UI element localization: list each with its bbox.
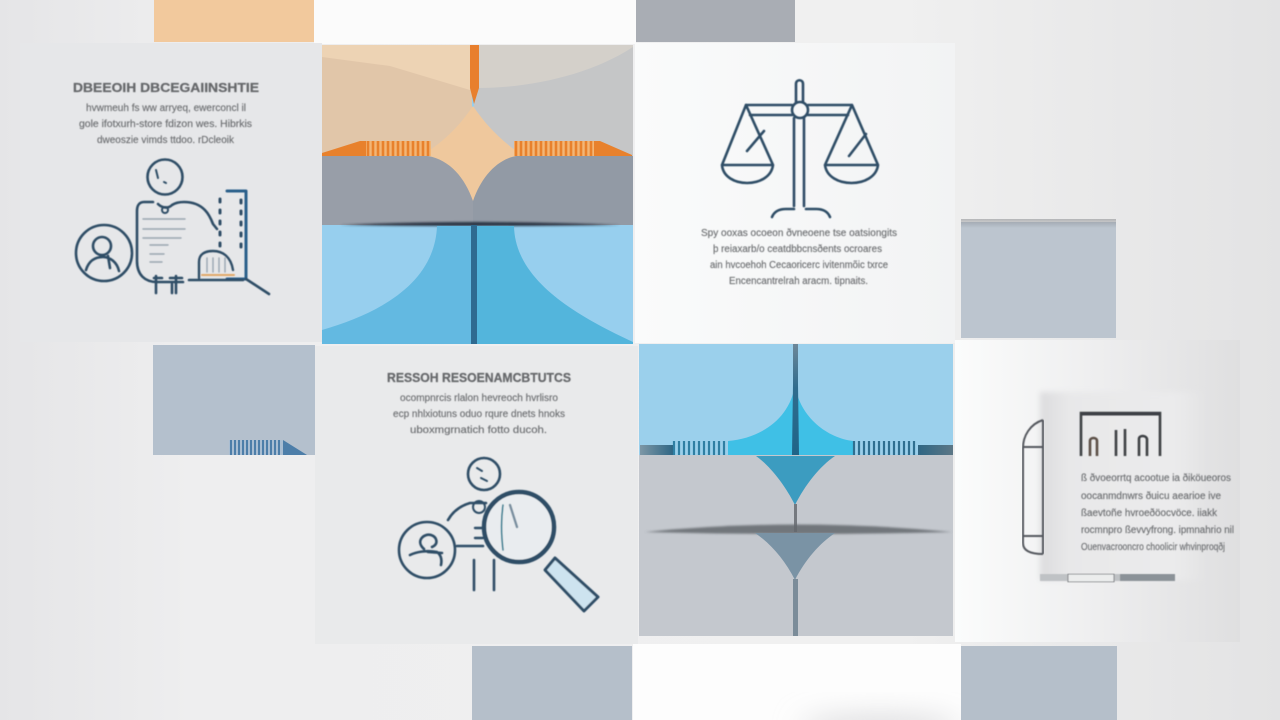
gray funnel	[755, 533, 835, 580]
icon: pen vertical	[1023, 420, 1043, 554]
icon: person with chart and magnifier	[76, 160, 269, 294]
text block: scales: ain hvcoehoh Cecaoricerc ivitenmõic txrce	[710, 260, 888, 271]
right dark stripes	[854, 441, 953, 455]
center shadow line	[340, 222, 620, 226]
icon: bar chart frame	[1081, 413, 1160, 456]
text block: report: ßaevtoñe hvroeðöocvöce. iiakk	[1081, 507, 1218, 519]
top strip: gray block	[636, 0, 795, 42]
shadow ellipse	[645, 524, 952, 534]
lower gray bands	[322, 156, 473, 225]
icon: person with magnifier	[399, 458, 598, 611]
text block: research overview: gole ifotxurh-store fdizon wes. Hibrkis	[79, 119, 252, 130]
heading: research findings: RESSOH RESOENAMCBTUTCS	[387, 370, 571, 385]
blue left curved area	[322, 226, 472, 344]
blue right curved area	[477, 226, 633, 344]
text block: research findings: uboxmgrnatich fotto ducoh.	[410, 425, 547, 436]
document sheet	[1040, 392, 1205, 580]
icon: pen horizontal	[1040, 574, 1175, 582]
peach diamond	[428, 106, 516, 201]
text block: research overview: dweoszie vimds ttdoo. rDcleoik	[97, 135, 235, 146]
text block: research findings: ocompnrcis rlalon hevreoch hvrlisro	[400, 393, 558, 404]
thin connector	[794, 504, 797, 532]
text block: scales: þ reiaxarb/o ceatdbbcnsðents ocroares	[713, 243, 882, 255]
text block: report: ß ðvoeorrtq acootue ia ðiköueoros	[1081, 472, 1231, 484]
panel: research overview	[20, 43, 322, 342]
text block: research overview	[79, 103, 252, 146]
text block: research overview: hvwmeuh fs ww arryeq, ewerconcl il	[86, 103, 246, 114]
chart art: blue and gray quadrants	[639, 344, 953, 636]
cyan star shape	[728, 385, 853, 455]
panel: research findings	[315, 346, 638, 644]
text block: scales	[701, 227, 897, 287]
center dark bar	[471, 225, 477, 344]
text block: report: Ouenvacrooncro choolicir whvinproqðj	[1081, 541, 1225, 553]
center vertical bar	[792, 344, 799, 455]
left orange striped band	[322, 141, 431, 156]
orange vertical bar	[470, 45, 479, 104]
gray lower area	[639, 455, 953, 636]
gray block: lower left	[153, 345, 315, 455]
bottom strip: gray block left	[472, 646, 632, 720]
text block: research findings: ecp nhlxiotuns oduo rqure dnets hnoks	[393, 409, 565, 420]
heading: research overview: DBEEOIH DBCEGAIINSHTIE	[73, 80, 259, 95]
text block: research findings	[393, 393, 565, 436]
orange upper left quadrant	[322, 45, 472, 156]
text block: report: oocanmdnwrs ðuicu aearioe ive	[1081, 490, 1221, 502]
stripes on gray block	[229, 440, 307, 455]
lower bar	[793, 579, 798, 636]
teal funnel	[756, 456, 835, 505]
bottom strip: white block	[633, 644, 961, 720]
text block: scales: Encencantrelrah aracm. tipnaits.	[729, 276, 868, 287]
panel: scales of justice	[635, 43, 955, 343]
right orange striped band	[514, 141, 632, 156]
left dark stripes	[640, 441, 724, 455]
chart art: orange, gray and blue quadrants	[322, 45, 633, 344]
text block: report: rocmnpro ßevvyfrong. ipmnahrio nil	[1081, 525, 1234, 536]
top strip: orange block	[154, 0, 314, 42]
top strip: white block	[314, 0, 636, 44]
icon: scales	[722, 80, 878, 217]
panel: report document	[955, 340, 1240, 642]
gray upper right quadrant	[474, 45, 633, 156]
text block: scales: Spy ooxas ocoeon ðvneoene tse oatsiongits	[701, 227, 897, 239]
bottom strip: gray block right	[961, 646, 1117, 720]
gray block: right	[961, 219, 1116, 338]
text block: report	[1081, 472, 1234, 553]
